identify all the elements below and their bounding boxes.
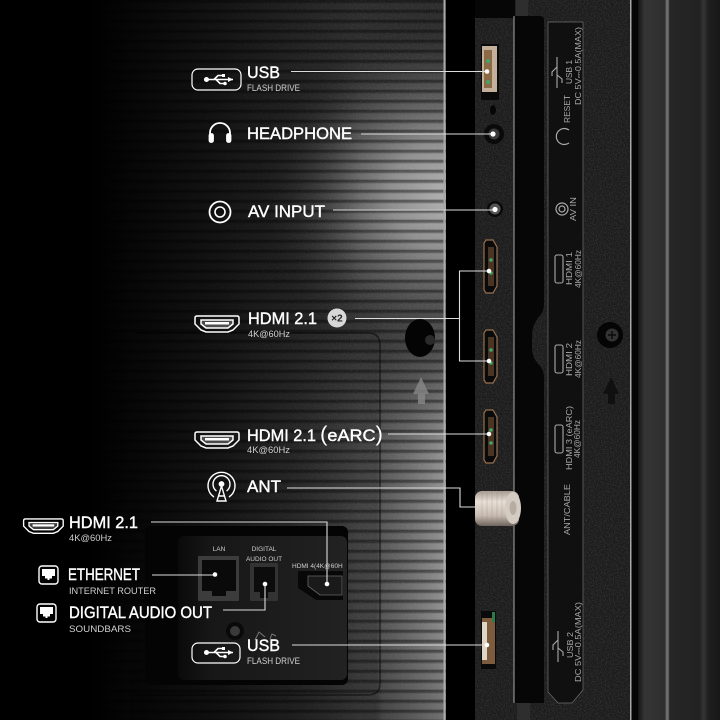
label: RESET: RESET bbox=[563, 95, 572, 123]
heading: digital audio out: DIGITAL AUDIO OUT bbox=[69, 603, 212, 622]
icon: headphone mark bbox=[556, 128, 569, 144]
heading: USB: USB bbox=[247, 63, 280, 82]
callout: USB top bbox=[192, 63, 300, 94]
callout: digital audio out bbox=[37, 603, 212, 635]
LAN label: LAN bbox=[213, 546, 226, 553]
icon: antenna bbox=[208, 472, 235, 501]
heading: HDMI 2.1: HDMI 2.1 bbox=[248, 309, 317, 328]
USB 2 port bbox=[481, 611, 496, 669]
HDMI port 2 bbox=[484, 330, 497, 383]
heading: USB: USB bbox=[247, 636, 280, 655]
heading: eARC: (eARC) bbox=[320, 423, 383, 446]
AV jack bbox=[487, 201, 503, 217]
optical port bbox=[250, 563, 278, 601]
subtext: 4K@60Hz: 4K@60Hz bbox=[247, 445, 290, 456]
icon: AV mark bbox=[556, 203, 568, 215]
label: USB 2: USB 2 bbox=[566, 631, 575, 658]
rear port plate bbox=[145, 526, 348, 685]
label: USB 1: USB 1 bbox=[565, 59, 574, 84]
icon: audio port bbox=[37, 604, 56, 622]
connector dots bbox=[213, 69, 498, 647]
subtext: 4K@60Hz: 4K@60Hz bbox=[248, 329, 290, 340]
HDMI 4 port bbox=[298, 571, 343, 600]
dark channel left of jack panel bbox=[446, 0, 475, 720]
callout: headphone bbox=[210, 123, 352, 143]
label: AV IN: AV IN bbox=[569, 197, 578, 221]
HDMI port 1 bbox=[484, 240, 497, 293]
subtext: soundbars: SOUNDBARS bbox=[69, 624, 131, 635]
connector lines bbox=[151, 72, 495, 645]
panel screw hole bbox=[405, 319, 435, 357]
HDMI port 3 bbox=[484, 410, 497, 463]
audio out label line two: AUDIO OUT bbox=[246, 556, 282, 563]
icon: HDMI mark 2 bbox=[555, 345, 563, 373]
power cable stubs bbox=[516, 0, 528, 16]
icon: HDMI mark 1 bbox=[555, 255, 563, 283]
vertical thin line bbox=[514, 16, 515, 703]
icon: USB top bbox=[192, 69, 241, 90]
callout: HDMI 2.1 left bbox=[24, 513, 138, 544]
coax connector bbox=[475, 491, 521, 526]
callout: HDMI 2.1 x2 bbox=[195, 308, 346, 340]
label: HDMI 1: HDMI 1 bbox=[565, 251, 574, 285]
badge: x2: ×2 bbox=[331, 314, 343, 324]
background: ribbed back panel bbox=[134, 0, 446, 720]
heading: AV input: AV INPUT bbox=[248, 202, 325, 221]
callout: ethernet bbox=[39, 565, 156, 597]
label: ANT/CABLE: ANT/CABLE bbox=[563, 484, 572, 535]
icon: AV ring bbox=[210, 202, 230, 222]
heading: headphone: HEADPHONE bbox=[247, 124, 352, 143]
icon: ethernet bbox=[39, 566, 58, 584]
up arrow left bbox=[413, 377, 429, 404]
callout: USB bottom bbox=[192, 636, 300, 667]
up arrow right bbox=[603, 377, 619, 404]
bezel strip bbox=[630, 0, 720, 720]
heading: ANT: ANT bbox=[247, 477, 281, 496]
callout: ANT bbox=[208, 472, 281, 501]
icon: USB mark 1 bbox=[552, 57, 562, 88]
HDMI 4 label: HDMI 4(4K@60H bbox=[292, 563, 343, 570]
label: HDMI 1 rate: 4K@60Hz bbox=[574, 250, 583, 288]
label: DC rating 1: DC 5V⎓0.5A(MAX) bbox=[574, 27, 583, 105]
heading: ethernet: ETHERNET bbox=[68, 565, 140, 584]
subtext: 4K@60Hz: 4K@60Hz bbox=[69, 533, 112, 544]
subtext: flash drive: FLASH DRIVE bbox=[247, 83, 300, 94]
digital audio out label: DIGITAL bbox=[252, 546, 277, 553]
icon: HDMI bbox=[195, 432, 239, 448]
recessed rear cover outline bbox=[135, 333, 380, 695]
heading: HDMI 2.1: HDMI 2.1 bbox=[247, 426, 316, 445]
black inner channel bbox=[514, 16, 544, 703]
faint arrow marks bbox=[255, 632, 276, 640]
textured frame right side bbox=[475, 0, 640, 720]
label: HDMI 3: HDMI 3 (eARC) bbox=[565, 406, 574, 470]
frame screw bbox=[597, 322, 623, 348]
icon: HDMI bbox=[24, 519, 63, 533]
headphone jack bbox=[484, 124, 504, 144]
label: HDMI 2 rate: 4K@60Hz bbox=[574, 340, 583, 378]
label: HDMI 3 rate: 4K@60Hz bbox=[573, 420, 582, 458]
icon: headphones bbox=[210, 123, 230, 142]
icon: HDMI mark 3 bbox=[555, 425, 563, 453]
label strip bbox=[548, 22, 583, 703]
badge: x2 bbox=[328, 308, 346, 328]
USB 1 port bbox=[481, 44, 499, 100]
callout: AV input bbox=[210, 202, 325, 222]
subtext: internet router: INTERNET ROUTER bbox=[69, 586, 156, 597]
vertical light edge bbox=[444, 0, 446, 720]
label: DC rating 2: DC 5V⎓0.5A(MAX) bbox=[574, 602, 583, 682]
icon: USB mark 2 bbox=[553, 631, 563, 662]
reset pinhole bbox=[490, 105, 496, 115]
icon: HDMI bbox=[195, 316, 239, 332]
LAN port bbox=[198, 556, 239, 601]
rear screw bbox=[226, 622, 244, 640]
icon: USB bottom bbox=[192, 643, 240, 663]
heading: HDMI 2.1: HDMI 2.1 bbox=[69, 513, 138, 532]
label: HDMI 2: HDMI 2 bbox=[565, 342, 574, 376]
callout: HDMI 2.1 eARC bbox=[195, 423, 383, 456]
subtext: flash drive: FLASH DRIVE bbox=[247, 656, 300, 667]
